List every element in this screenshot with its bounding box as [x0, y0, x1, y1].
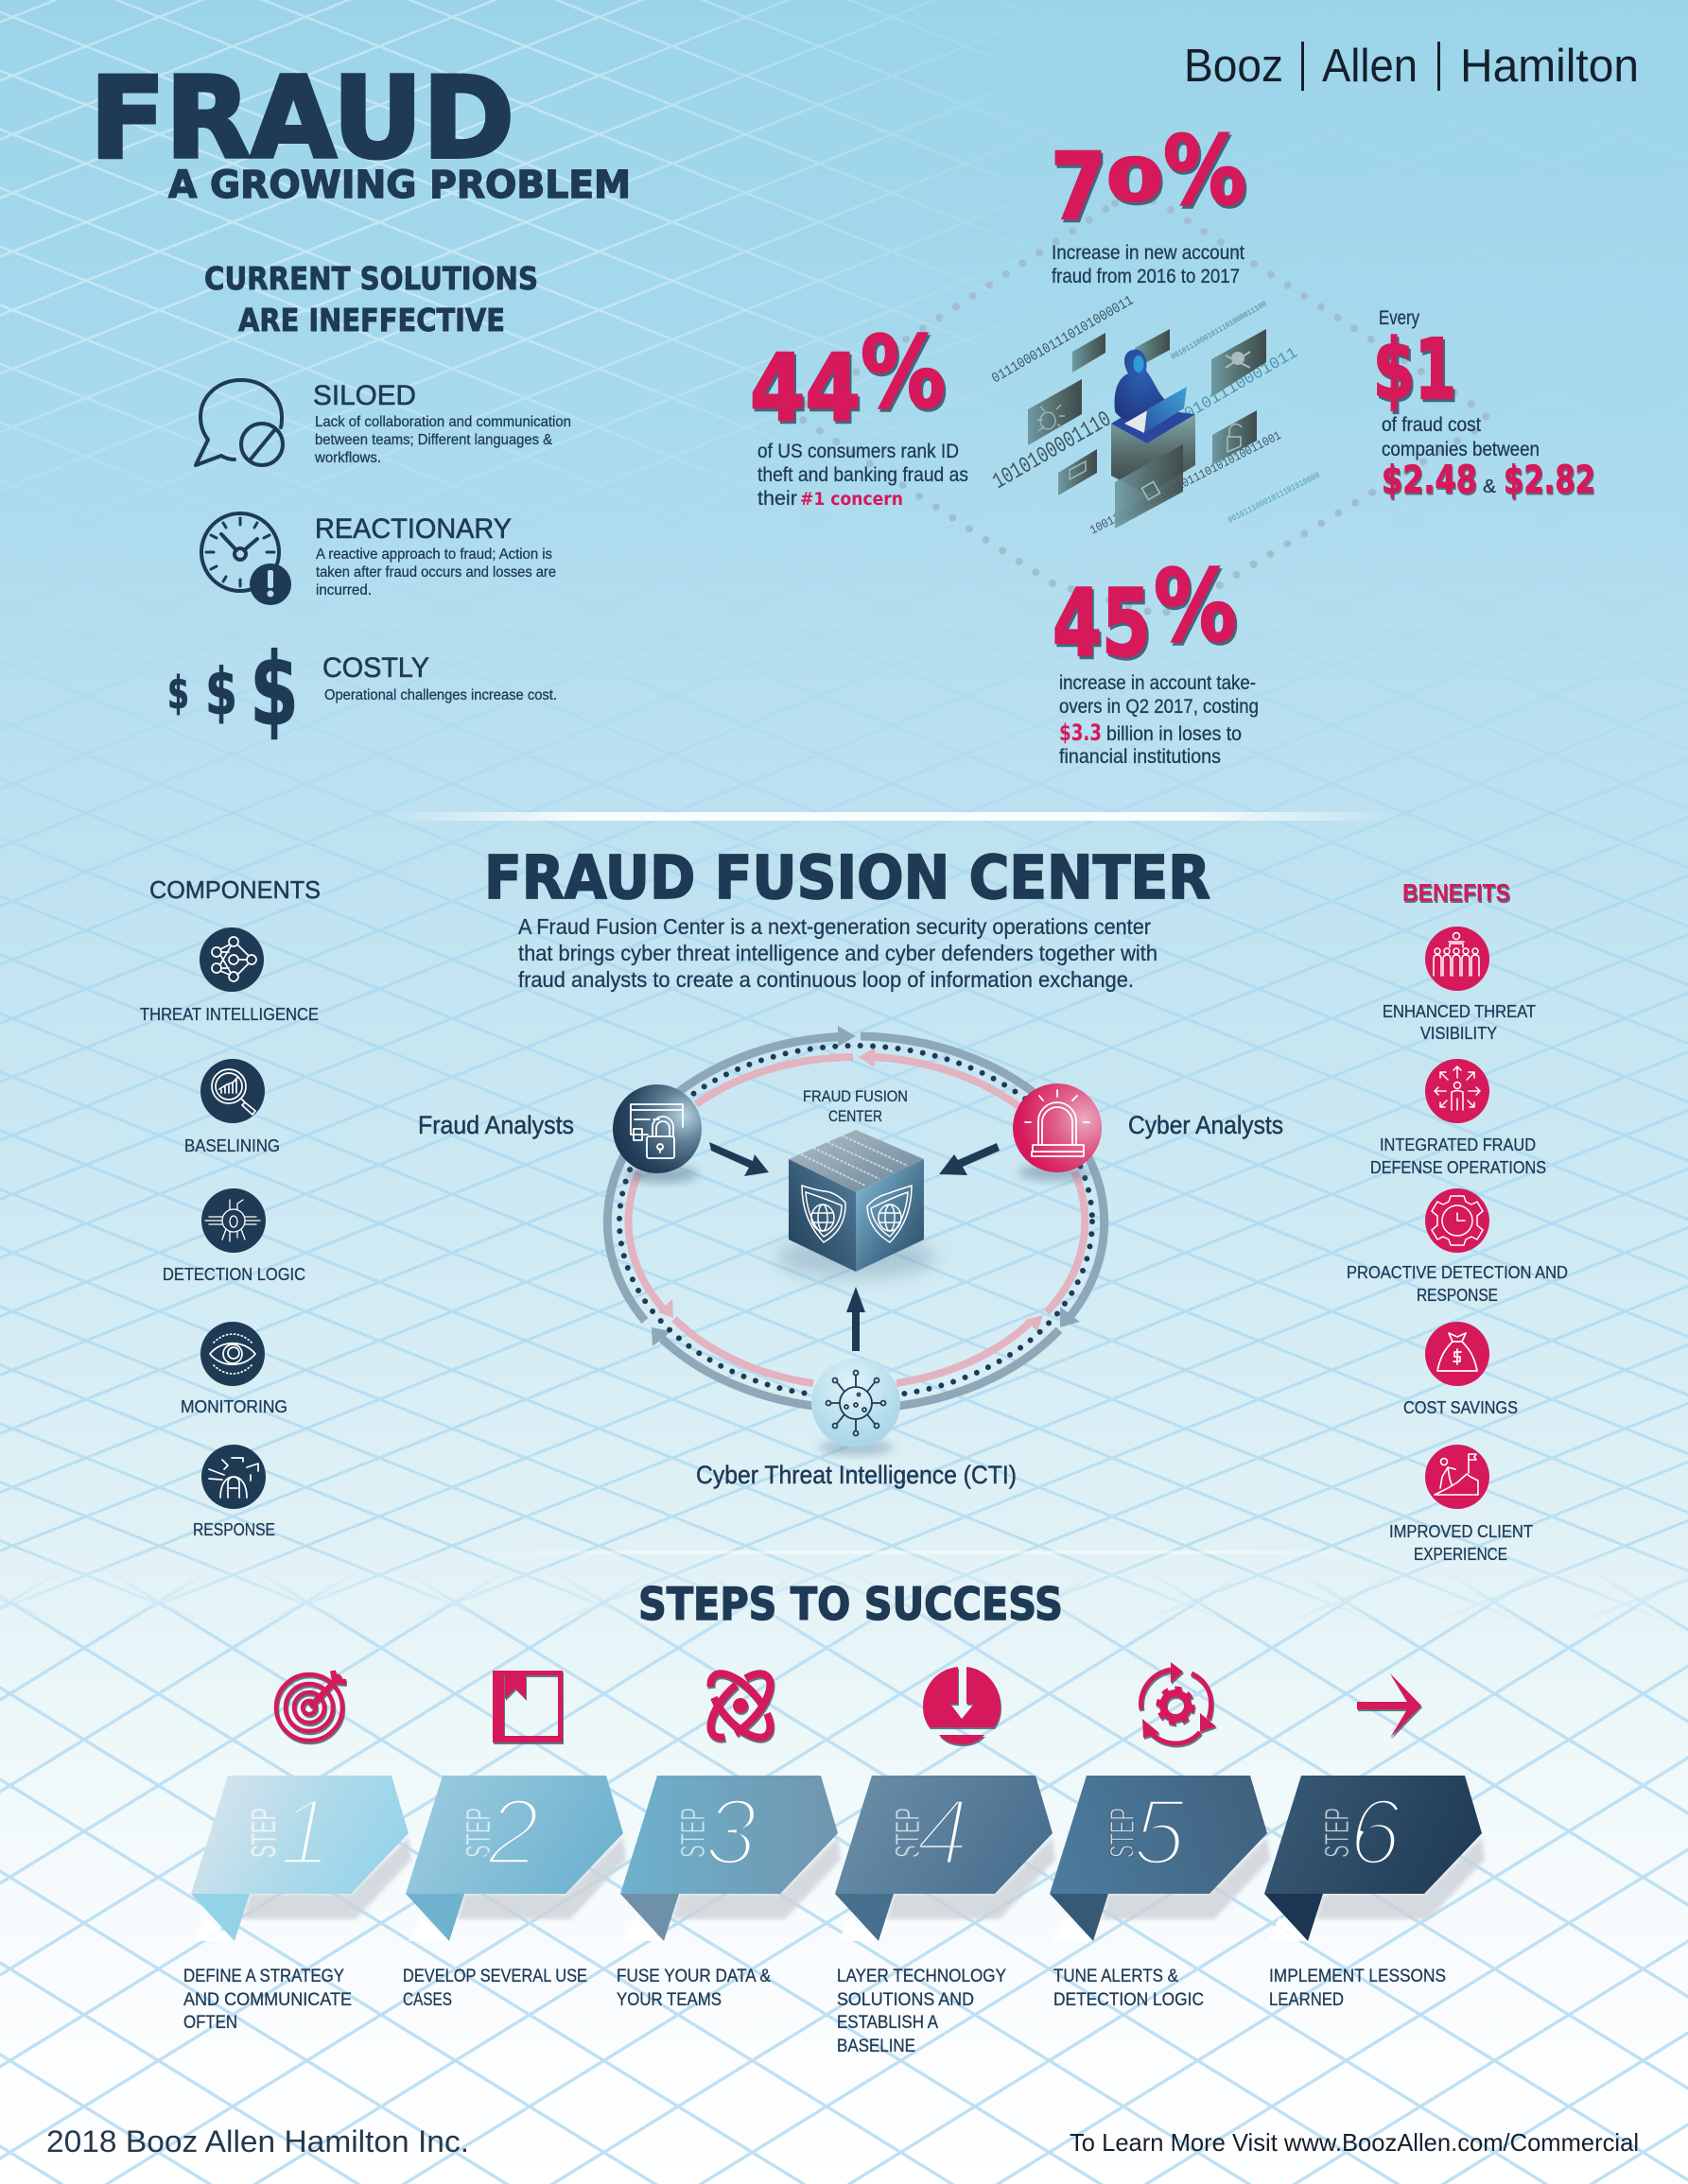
- step 1 label: AND COMMUNICATE: [183, 1990, 352, 2010]
- binary streams: 0101110001011: [1182, 344, 1301, 424]
- step 2 ribbon: STEP: [459, 1808, 497, 1858]
- step 2 label: DEVELOP SEVERAL USE: [403, 1967, 587, 1986]
- step 4 label: [837, 1967, 1006, 2056]
- step 3 label: [617, 1967, 771, 2010]
- component: baselining: BASELINING: [184, 1136, 280, 1155]
- logo: Booz Allen Hamilton: [1184, 41, 1639, 92]
- stat: every dollar: Every: [1379, 307, 1419, 329]
- description: Fraud Fusion Center: fraud analysts to create a continuous loop of information exchange.: [518, 967, 1134, 992]
- cube label: FRAUD FUSION: [803, 1087, 908, 1105]
- stat: every dollar: &: [1483, 477, 1497, 497]
- binary streams: 00101110001011101000011100: [1170, 300, 1268, 362]
- stat: 44 percent: %: [861, 315, 946, 430]
- panel: steps: [183, 1662, 1485, 2056]
- stat: 44 percent: of US consumers rank ID: [757, 441, 959, 462]
- component: response: [193, 1445, 275, 1539]
- step 6 ribbon: [1264, 1776, 1485, 1941]
- step 4 ribbon: 4: [916, 1779, 969, 1885]
- step icon: arrow: [1357, 1673, 1421, 1738]
- step 1 ribbon: [191, 1776, 411, 1941]
- costly text: COSTLY: [322, 652, 429, 684]
- step 4 label: LAYER TECHNOLOGY: [837, 1967, 1006, 1986]
- siloed text: [313, 380, 571, 466]
- costly text: Operational challenges increase cost.: [324, 687, 557, 703]
- stat: 45 percent: [1053, 548, 1259, 768]
- panel: current solutions are ineffective: [167, 260, 571, 748]
- component: monitoring: MONITORING: [181, 1397, 287, 1416]
- stat: every dollar: [1373, 307, 1595, 502]
- step 4 ribbon: [835, 1776, 1055, 1941]
- stat: 45 percent: 45: [1053, 570, 1151, 678]
- footer: learn more link: To Learn More Visit www.BoozAllen.com/Commercial: [1070, 2128, 1639, 2157]
- reactionary text: REACTIONARY: [315, 513, 512, 545]
- stat: 44 percent: #1 concern: [800, 489, 903, 510]
- component: detection logic: DETECTION LOGIC: [163, 1265, 305, 1284]
- benefit: proactive detection and response: [1347, 1188, 1568, 1305]
- reactionary text: taken after fraud occurs and losses are: [316, 564, 556, 581]
- step 4 label: SOLUTIONS AND: [837, 1990, 974, 2010]
- benefit: enhanced threat visibility: ENHANCED THREAT: [1383, 1002, 1536, 1021]
- step 2 label: CASES: [403, 1990, 452, 2010]
- stat: every dollar: $2.48: [1382, 459, 1477, 502]
- cube label: CENTER: [828, 1107, 882, 1125]
- step 1 ribbon: STEP: [244, 1808, 283, 1858]
- title: FRAUD A Growing Problem: A GROWING PROBLEM: [168, 164, 631, 207]
- step 3 ribbon: STEP: [673, 1808, 712, 1858]
- benefit: integrated fraud defense operations: DEFENSE OPERATIONS: [1370, 1158, 1546, 1177]
- logo: Booz Allen Hamilton: Booz: [1184, 41, 1283, 92]
- fusion cube with shields: [775, 1130, 936, 1278]
- benefit: cost savings: COST SAVINGS: [1403, 1398, 1518, 1417]
- stat: every dollar: companies between: [1382, 439, 1540, 460]
- benefit: improved client experience: EXPERIENCE: [1414, 1545, 1507, 1564]
- pedestal: [1111, 407, 1195, 529]
- heading: steps to success: STEPS TO SUCCESS: [638, 1579, 1063, 1631]
- stat: 45 percent: %: [1154, 548, 1237, 664]
- heading: Fraud Fusion Center: FRAUD FUSION CENTER: [484, 843, 1210, 912]
- step 5 label: [1053, 1967, 1204, 2010]
- benefit: enhanced threat visibility: [1383, 927, 1536, 1043]
- heading: components: COMPONENTS: [149, 875, 321, 904]
- node: cyber threat intelligence: [696, 1359, 1017, 1489]
- stat: 45 percent: financial institutions: [1059, 746, 1221, 768]
- outer grey cycle arrows: [607, 1026, 1105, 1409]
- siloed text: between teams; Different languages &: [315, 432, 552, 448]
- benefit: integrated fraud defense operations: INTEGRATED FRAUD: [1380, 1135, 1536, 1154]
- description: Fraud Fusion Center: A Fraud Fusion Center is a next-generation security operations center: [518, 914, 1151, 939]
- step 3 label: YOUR TEAMS: [617, 1990, 722, 2010]
- description: Fraud Fusion Center: [518, 914, 1157, 992]
- binary streams: 100110101010100101110101010011001: [1088, 428, 1283, 538]
- step 1 label: OFTEN: [183, 2013, 237, 2033]
- step 2 ribbon: [406, 1776, 626, 1941]
- icon: dollar signs: $: [167, 667, 189, 719]
- heading: benefits: BENEFITS: [1402, 878, 1510, 907]
- node: fraud analysts: Fraud Analysts: [418, 1111, 574, 1139]
- component: detection logic: [163, 1188, 305, 1284]
- stat: 70 percent: [1051, 115, 1246, 287]
- benefit: cost savings: [1403, 1322, 1518, 1417]
- benefit: proactive detection and response: RESPONSE: [1417, 1286, 1498, 1305]
- node: cyber analysts: Cyber Analysts: [1128, 1111, 1283, 1139]
- benefit: integrated fraud defense operations: [1370, 1059, 1546, 1177]
- stat: 70 percent: %: [1163, 115, 1246, 226]
- stat: 44 percent: 44: [750, 335, 861, 442]
- hooded figure and laptop: [1115, 350, 1187, 433]
- stat: 44 percent: theft and banking fraud as: [757, 464, 968, 486]
- description: Fraud Fusion Center: that brings cyber threat intelligence and cyber defenders together with: [518, 941, 1157, 965]
- stat: 45 percent: $3.3: [1059, 719, 1102, 746]
- costly text: [322, 652, 557, 703]
- benefit: enhanced threat visibility: VISIBILITY: [1420, 1024, 1497, 1043]
- component: baselining: [184, 1059, 280, 1155]
- step 2 ribbon: 2: [486, 1779, 540, 1885]
- panel: benefits: [1347, 878, 1568, 1564]
- step 2 label: [403, 1967, 587, 2010]
- step 5 label: DETECTION LOGIC: [1053, 1990, 1204, 2010]
- step 6 ribbon: STEP: [1317, 1808, 1356, 1858]
- node: cyber analysts: [1013, 1083, 1283, 1181]
- stat: 45 percent: increase in account take-: [1059, 672, 1256, 694]
- binary streams: [989, 293, 1322, 538]
- reactionary text: [315, 513, 556, 598]
- stat: 70 percent: fraud from 2016 to 2017: [1052, 266, 1240, 287]
- footer: copyright: 2018 Booz Allen Hamilton Inc.: [46, 2124, 469, 2158]
- heading: current solutions: ARE INEFFECTIVE: [238, 302, 505, 338]
- stat: every dollar: $2.82: [1504, 459, 1595, 502]
- benefit: proactive detection and response: PROACTIVE DETECTION AND: [1347, 1263, 1568, 1282]
- diagram: fusion loop: [418, 1026, 1283, 1489]
- cube label: [803, 1087, 908, 1125]
- step 6 ribbon: 6: [1349, 1779, 1401, 1885]
- siloed text: Lack of collaboration and communication: [315, 414, 571, 430]
- benefit: improved client experience: IMPROVED CLIENT: [1389, 1522, 1533, 1541]
- node: fraud analysts: [418, 1084, 702, 1183]
- step 6 label: [1269, 1967, 1446, 2010]
- icon: dollar signs: [167, 632, 299, 748]
- step 4 label: BASELINE: [837, 2037, 915, 2056]
- stat: 44 percent: their: [757, 488, 797, 510]
- step 3 ribbon: 3: [705, 1779, 757, 1885]
- step icon: atom: [701, 1664, 780, 1747]
- step 3 ribbon: [620, 1776, 841, 1941]
- component: response: RESPONSE: [193, 1520, 275, 1539]
- node: cyber threat intelligence: Cyber Threat Intelligence (CTI): [696, 1461, 1017, 1489]
- step 1 label: DEFINE A STRATEGY: [183, 1967, 344, 1986]
- heading: current solutions: CURRENT SOLUTIONS: [204, 260, 538, 297]
- component: threat intelligence: THREAT INTELLIGENCE: [140, 1005, 319, 1024]
- logo: Booz Allen Hamilton: Hamilton: [1460, 41, 1639, 92]
- floating panels: [1028, 329, 1266, 495]
- binary streams: 0111000101110101000011: [989, 293, 1137, 387]
- step 4 label: ESTABLISH A: [837, 2013, 938, 2033]
- icon: clock with alert: [201, 513, 291, 605]
- step 4 ribbon: STEP: [888, 1808, 927, 1858]
- step 5 ribbon: STEP: [1103, 1808, 1141, 1858]
- siloed text: SILOED: [313, 380, 416, 411]
- component: monitoring: [181, 1322, 287, 1416]
- logo: Booz Allen Hamilton: Allen: [1322, 41, 1418, 92]
- heading: current solutions: [204, 260, 538, 338]
- step icon: bookmark: [493, 1671, 563, 1742]
- step 5 label: TUNE ALERTS &: [1053, 1967, 1178, 1986]
- stat: 70 percent: 0: [1106, 146, 1163, 215]
- title: FRAUD A Growing Problem: [90, 54, 631, 207]
- panel: components: [140, 875, 321, 1539]
- stat: every dollar: $1: [1373, 321, 1456, 418]
- step 1 label: [183, 1967, 352, 2033]
- stat: 45 percent: overs in Q2 2017, costing: [1059, 696, 1259, 718]
- stat: every dollar: of fraud cost: [1382, 414, 1481, 436]
- stat: 70 percent: Increase in new account: [1052, 242, 1244, 264]
- component: threat intelligence: [140, 927, 319, 1024]
- binary streams: 00101110001011101010000: [1227, 471, 1322, 526]
- reactionary text: incurred.: [316, 582, 372, 598]
- icon: speech bubble blocked: [196, 380, 283, 465]
- illustration: hacker with floating data panels: [989, 293, 1322, 538]
- dotted cycle: [619, 1046, 1092, 1397]
- step 6 label: IMPLEMENT LESSONS: [1269, 1967, 1446, 1986]
- arrows into cube: [709, 1142, 1000, 1351]
- icon: dollar signs: $: [250, 632, 299, 748]
- stat: 45 percent: billion in loses to: [1106, 723, 1242, 745]
- reactionary text: A reactive approach to fraud; Action is: [316, 546, 552, 563]
- step 1 ribbon: 1: [279, 1779, 332, 1885]
- step 5 ribbon: 5: [1133, 1779, 1186, 1885]
- step icon: gear cycle: [1141, 1662, 1216, 1743]
- stat: 44 percent: [750, 315, 968, 510]
- stat: 70 percent: 7: [1051, 133, 1106, 240]
- title: FRAUD A Growing Problem: FRAUD: [90, 54, 514, 184]
- siloed text: workflows.: [314, 450, 381, 466]
- icon: dollar signs: $: [205, 655, 237, 730]
- benefit: improved client experience: [1389, 1445, 1533, 1564]
- pink cycle arrows: [629, 1048, 1085, 1383]
- step 3 label: FUSE YOUR DATA &: [617, 1967, 771, 1986]
- dotted diamond connector: [799, 198, 1487, 615]
- step 6 label: LEARNED: [1269, 1990, 1344, 2010]
- step icon: target: [276, 1671, 346, 1741]
- step icon: download: [923, 1667, 1001, 1744]
- step 5 ribbon: [1050, 1776, 1270, 1941]
- binary streams: 1010100001110: [989, 407, 1116, 495]
